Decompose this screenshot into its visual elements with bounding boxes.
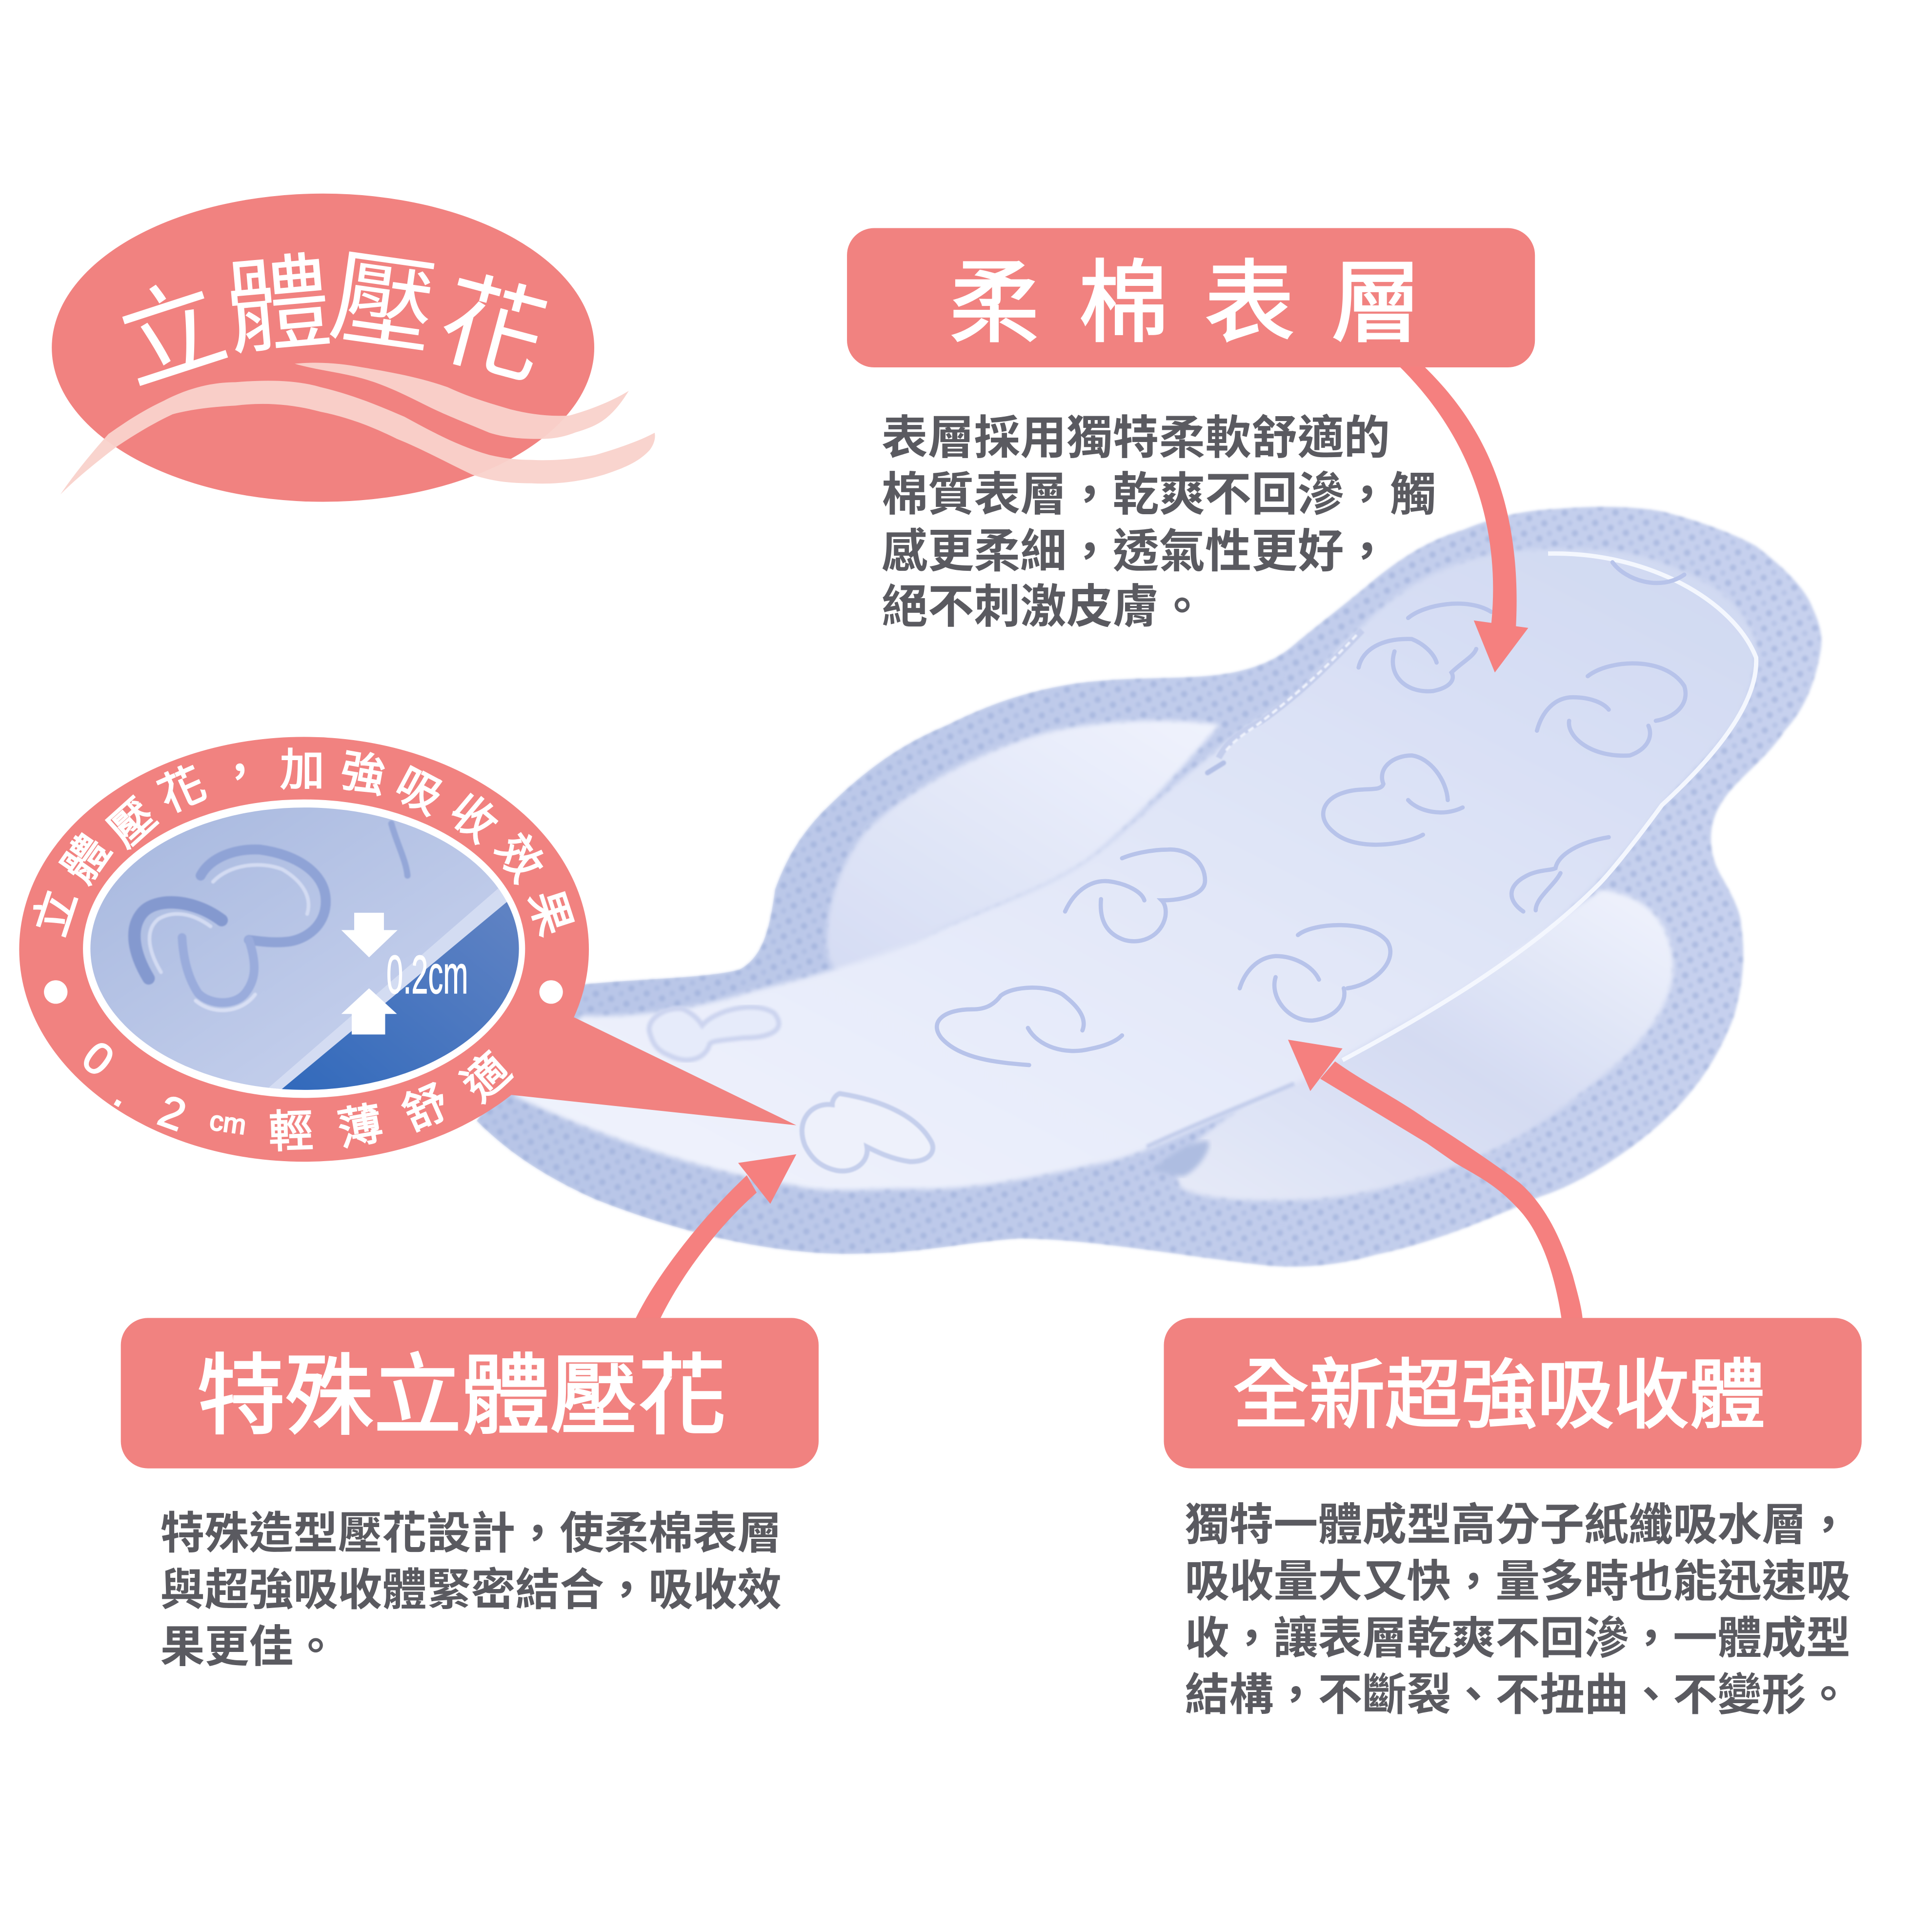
ring text bottom: 舒 bbox=[396, 1076, 457, 1140]
embossed pattern 2 bbox=[1240, 925, 1390, 1021]
text block: soft cotton surface: 棉質表層，乾爽不回滲，觸 bbox=[882, 469, 1436, 521]
text block: new absorbent core: 吸收量大又快，量多時也能迅速吸 bbox=[1185, 1557, 1851, 1607]
embossed pattern 5 bbox=[1537, 664, 1686, 756]
upward thickness arrow bbox=[342, 988, 397, 1034]
text block: new absorbent core: 獨特一體成型高分子紙纖吸水層， bbox=[1185, 1500, 1851, 1550]
arrow: surface to pad bbox=[1399, 366, 1528, 672]
title characters bbox=[104, 239, 558, 405]
embossed pattern 8 bbox=[802, 1093, 933, 1171]
ring text top: 收 bbox=[440, 785, 506, 852]
text block: new absorbent core bbox=[1185, 1500, 1851, 1720]
ring text bottom: cm bbox=[208, 1105, 248, 1140]
right ring dot bbox=[540, 980, 563, 1004]
decorative lower wave bbox=[60, 381, 655, 494]
dots on ring bbox=[44, 980, 67, 1004]
decorative upper wave bbox=[295, 362, 629, 439]
ring text bottom: 輕 bbox=[268, 1106, 314, 1157]
ring text top: 體 bbox=[53, 827, 120, 892]
embossed motif close-up bbox=[135, 824, 407, 1010]
header text: 全新超強吸收體 bbox=[1233, 1353, 1765, 1438]
text block: soft cotton surface: 絕不刺激皮膚。 bbox=[882, 581, 1205, 633]
lower wing panel bbox=[1178, 889, 1673, 1201]
ring text top: ， bbox=[215, 745, 266, 800]
callout ring bbox=[19, 737, 589, 1162]
text block: soft cotton surface: 感更柔細，透氣性更好， bbox=[882, 525, 1390, 577]
ring text top: 吸 bbox=[387, 759, 450, 824]
text block: special embossing: 果更佳。 bbox=[161, 1622, 338, 1671]
seam near upper wing bbox=[1208, 630, 1362, 773]
title characters: 壓 bbox=[324, 239, 443, 368]
zoomed surface photo bbox=[87, 805, 533, 1102]
text block: new absorbent core: 結構，不斷裂、不扭曲、不變形。 bbox=[1185, 1670, 1851, 1720]
white thickness arrows bbox=[342, 913, 398, 957]
ring text top: 花 bbox=[151, 758, 212, 822]
ring text bottom: 薄 bbox=[334, 1098, 386, 1155]
header: soft cotton surface bbox=[847, 228, 1535, 367]
core rim highlight bbox=[1343, 554, 1756, 1060]
pad outer textured edge bbox=[477, 507, 1821, 1267]
header: new absorbent core bbox=[1164, 1318, 1862, 1469]
arrow: embossing to pad bbox=[635, 1154, 796, 1319]
title characters: 體 bbox=[222, 243, 335, 368]
product illustration: sanitary pad bbox=[477, 507, 1821, 1267]
embossed pattern 4 bbox=[1323, 755, 1463, 845]
ring text bottom: . bbox=[106, 1067, 142, 1117]
circular zoom callout bbox=[19, 737, 796, 1162]
embossed pattern 3 bbox=[937, 987, 1122, 1065]
ring text bottom bbox=[73, 1031, 520, 1157]
text block: soft cotton surface: 表層採用獨特柔軟舒適的 bbox=[882, 412, 1390, 464]
pad edge shading bbox=[477, 507, 1821, 1267]
title characters: 立 bbox=[104, 263, 239, 405]
embossed pattern 6 bbox=[1359, 604, 1491, 691]
text block: special embossing bbox=[161, 1509, 782, 1671]
thickness label: 0.2cm bbox=[386, 944, 468, 1005]
badge: top oval title bbox=[52, 194, 655, 502]
embossed pattern 7 bbox=[649, 1007, 779, 1060]
dark patch beside lower wing bbox=[1152, 1141, 1209, 1177]
header text: 特殊立體壓花 bbox=[197, 1347, 726, 1446]
arrow: absorbent core to pad bbox=[1288, 1040, 1583, 1320]
ring text top: 加 bbox=[280, 745, 324, 795]
text block: soft cotton surface bbox=[882, 412, 1436, 633]
absorbent core surface bbox=[514, 549, 1757, 1190]
embossed pattern 1 bbox=[1065, 849, 1205, 941]
callout pointer bbox=[495, 1017, 796, 1125]
ring text top: 壓 bbox=[99, 790, 165, 857]
embossed pattern 9 bbox=[1511, 837, 1609, 911]
header box bbox=[121, 1318, 819, 1469]
ring text top: 強 bbox=[337, 745, 389, 802]
ring text bottom: 0 bbox=[73, 1031, 123, 1086]
text block: special embossing: 特殊造型壓花設計，使柔棉表層 bbox=[161, 1509, 782, 1558]
header box bbox=[1164, 1318, 1862, 1469]
ring text top: 效 bbox=[486, 825, 552, 891]
text block: special embossing: 與超強吸收體緊密結合，吸收效 bbox=[161, 1566, 782, 1615]
header text: 柔棉表層 bbox=[949, 253, 1422, 354]
upper wing panel bbox=[826, 721, 1220, 973]
header box bbox=[847, 228, 1535, 367]
crease along lower core edge bbox=[1147, 1084, 1294, 1147]
embossed pattern 10 bbox=[1612, 562, 1684, 583]
header: special embossing bbox=[121, 1318, 819, 1469]
ring text top: 果 bbox=[520, 884, 581, 942]
ring text bottom: 2 bbox=[152, 1086, 192, 1141]
oval background bbox=[52, 194, 594, 502]
white inner ring bbox=[83, 800, 525, 1098]
ring text top: 立 bbox=[25, 884, 86, 942]
text block: new absorbent core: 收，讓表層乾爽不回滲，一體成型 bbox=[1185, 1614, 1851, 1663]
ring text bottom: 適 bbox=[453, 1044, 520, 1111]
ring text top bbox=[25, 745, 581, 942]
title characters: 花 bbox=[428, 260, 558, 398]
